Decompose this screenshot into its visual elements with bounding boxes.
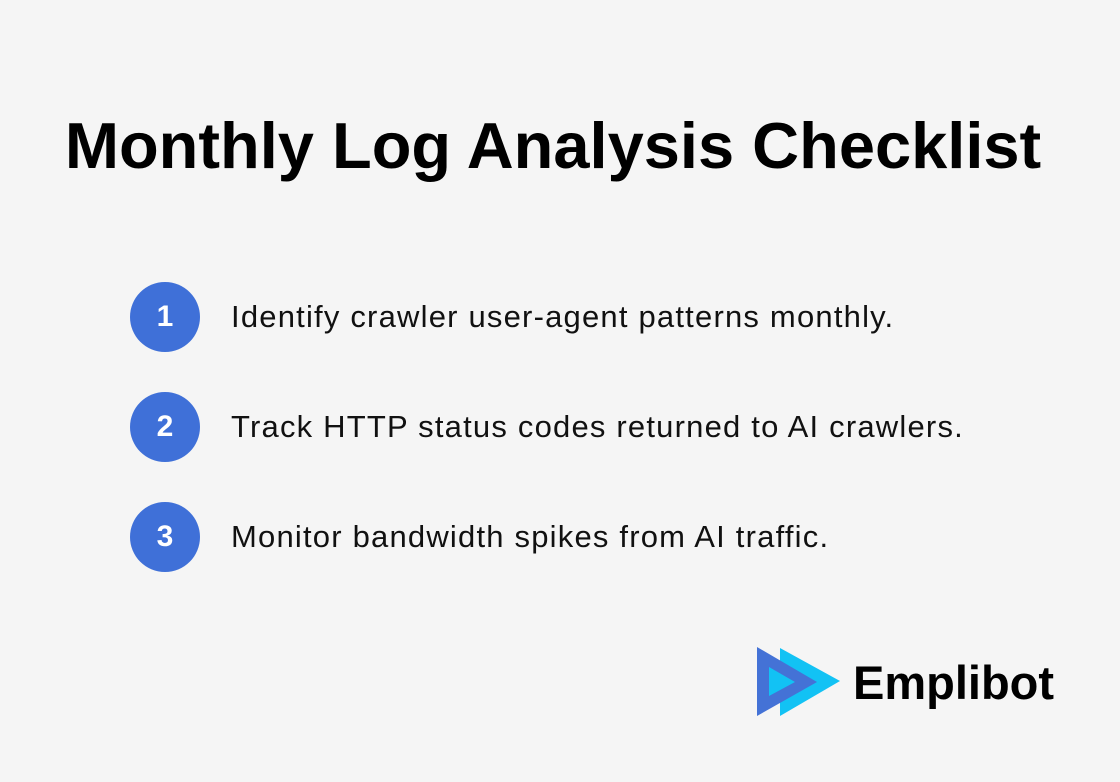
item 1: Identify crawler user-agent patterns monthly. — [231, 299, 894, 334]
title: Monthly Log Analysis Checklist — [65, 109, 1041, 182]
item 3: 3 — [157, 520, 173, 553]
item 3: Monitor bandwidth spikes from AI traffic. — [231, 519, 829, 554]
item 2: Track HTTP status codes returned to AI crawlers. — [231, 409, 964, 444]
logo — [757, 647, 1054, 716]
item 1: 1 — [157, 300, 173, 333]
item 1 — [130, 282, 894, 352]
item 2: 2 — [157, 410, 173, 443]
item 3 — [130, 502, 829, 572]
item 2 — [130, 392, 964, 462]
logo: Emplibot — [853, 656, 1054, 709]
